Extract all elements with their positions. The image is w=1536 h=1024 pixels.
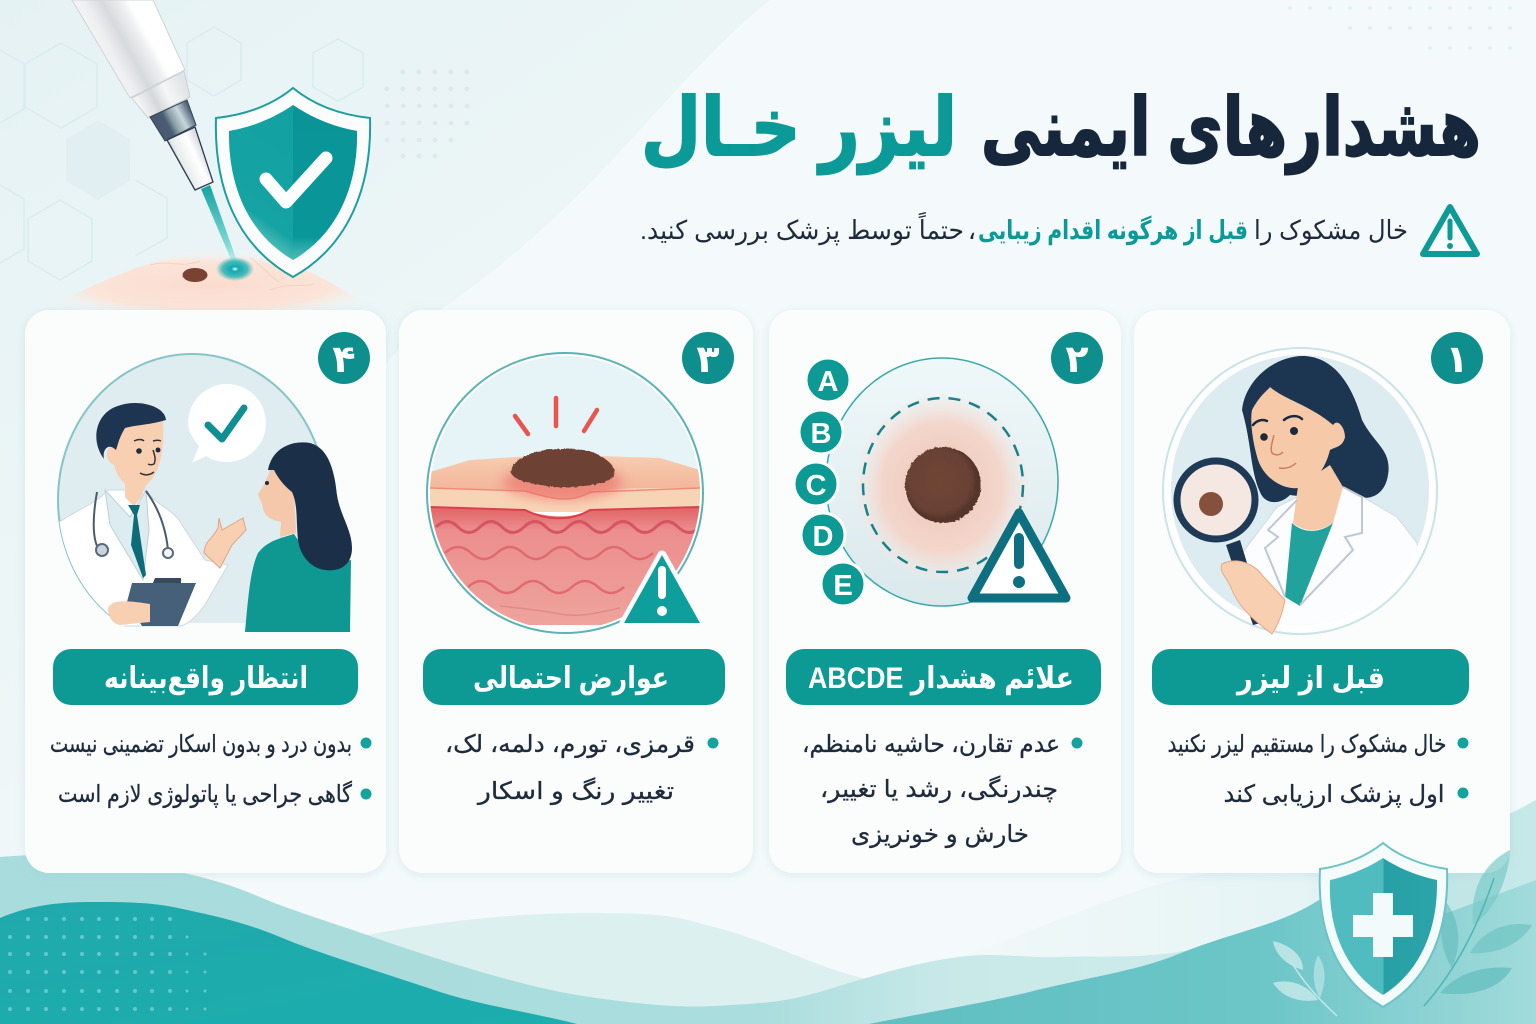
step number: ۴ — [332, 339, 356, 381]
step number — [1051, 332, 1103, 384]
bullet list — [445, 731, 718, 805]
heading pill: قبل از لیزر — [1235, 662, 1385, 695]
step number — [1431, 332, 1483, 384]
heading pill — [53, 649, 358, 705]
doctor — [55, 403, 246, 626]
decorative leaves — [1273, 850, 1532, 1016]
bullet list: چندرنگی، رشد یا تغییر، — [820, 775, 1058, 803]
card background — [769, 310, 1121, 873]
shield with check — [216, 88, 370, 277]
laser beam — [201, 185, 239, 269]
title: لیزر خـال — [641, 83, 957, 175]
mole — [511, 449, 614, 487]
wave dot pattern — [8, 917, 206, 1011]
step number — [318, 332, 370, 384]
hexagon pattern — [0, 27, 363, 280]
panel: step 1 — [1134, 310, 1510, 873]
irritation marks — [515, 398, 597, 434]
title — [641, 83, 1481, 175]
icon: warning triangle — [1423, 207, 1477, 254]
heading pill — [786, 649, 1101, 705]
subtitle — [640, 211, 1408, 246]
illustration: skin cross-section — [425, 350, 705, 633]
magnifier — [1177, 461, 1285, 634]
skin patch — [40, 246, 380, 312]
mole — [182, 268, 208, 282]
coat — [1244, 486, 1418, 625]
heading pill — [423, 649, 725, 705]
subtitle: ، — [968, 215, 976, 245]
mole — [905, 447, 981, 523]
bullet list: خارش و خونریزی — [851, 821, 1029, 848]
bullet list — [1168, 731, 1468, 808]
step number: ۳ — [696, 339, 720, 381]
ABCDE badges — [794, 358, 865, 606]
card background — [25, 310, 386, 873]
panel: step 4 — [25, 310, 386, 873]
hair — [1242, 356, 1389, 502]
laser handpiece — [72, 0, 213, 190]
heading pill: عوارض احتمالی — [473, 662, 669, 695]
panel: step 3 — [399, 310, 753, 873]
illustration: ABCDE mole check — [794, 358, 1066, 606]
bullet list: تغییر رنگ و اسکار — [477, 777, 674, 805]
bullet list: عدم تقارن، حاشیه نامنظم، — [802, 731, 1060, 758]
speech bubble — [188, 384, 266, 463]
warning triangle — [972, 513, 1066, 598]
ABCDE badges: D — [813, 521, 833, 553]
subtitle: خال مشکوک را — [1254, 215, 1408, 246]
warning triangle — [624, 555, 700, 623]
bullet list: بدون درد و بدون اسکار تضمینی نیست — [50, 731, 352, 758]
step number: ۱ — [1445, 339, 1469, 381]
face — [1251, 387, 1345, 488]
bullet list: خال مشکوک را مستقیم لیزر نکنید — [1168, 731, 1446, 758]
hero illustration: laser and shield — [40, 0, 380, 312]
bullet list — [50, 731, 372, 808]
ABCDE badges: A — [818, 366, 839, 398]
step number: ۲ — [1065, 339, 1089, 381]
ABCDE badges: C — [806, 470, 827, 502]
panel: step 2 — [769, 310, 1121, 873]
bullet list: گاهی جراحی یا پاتولوژی لازم است — [58, 780, 352, 808]
bottom waves — [0, 800, 1536, 1024]
heading pill: انتظار واقع‌بینانه — [104, 662, 308, 696]
bullet list: قرمزی، تورم، دلمه، لک، — [445, 731, 695, 758]
illustration: doctor and patient — [55, 354, 352, 646]
illustration: woman with magnifier — [1163, 348, 1437, 640]
subtitle: حتماً توسط پزشک بررسی کنید. — [640, 211, 964, 246]
card background — [399, 310, 753, 873]
icon: medical shield — [1320, 843, 1447, 1007]
bullet list — [802, 731, 1082, 848]
heading pill — [1152, 649, 1469, 705]
ABCDE badges: E — [833, 570, 853, 602]
card background — [1134, 310, 1510, 873]
subtitle: قبل از هرگونه اقدام زیبایی — [978, 215, 1248, 246]
dot pattern right — [1288, 6, 1512, 50]
heading pill: علائم هشدار ABCDE — [808, 662, 1074, 696]
bullet list: اول پزشک ارزیابی کند — [1224, 781, 1444, 808]
laser spot — [216, 257, 254, 281]
patient — [245, 442, 352, 632]
step number — [682, 332, 734, 384]
ABCDE badges: B — [811, 418, 831, 450]
neck and shirt — [1293, 465, 1343, 530]
dot pattern left — [384, 70, 470, 158]
